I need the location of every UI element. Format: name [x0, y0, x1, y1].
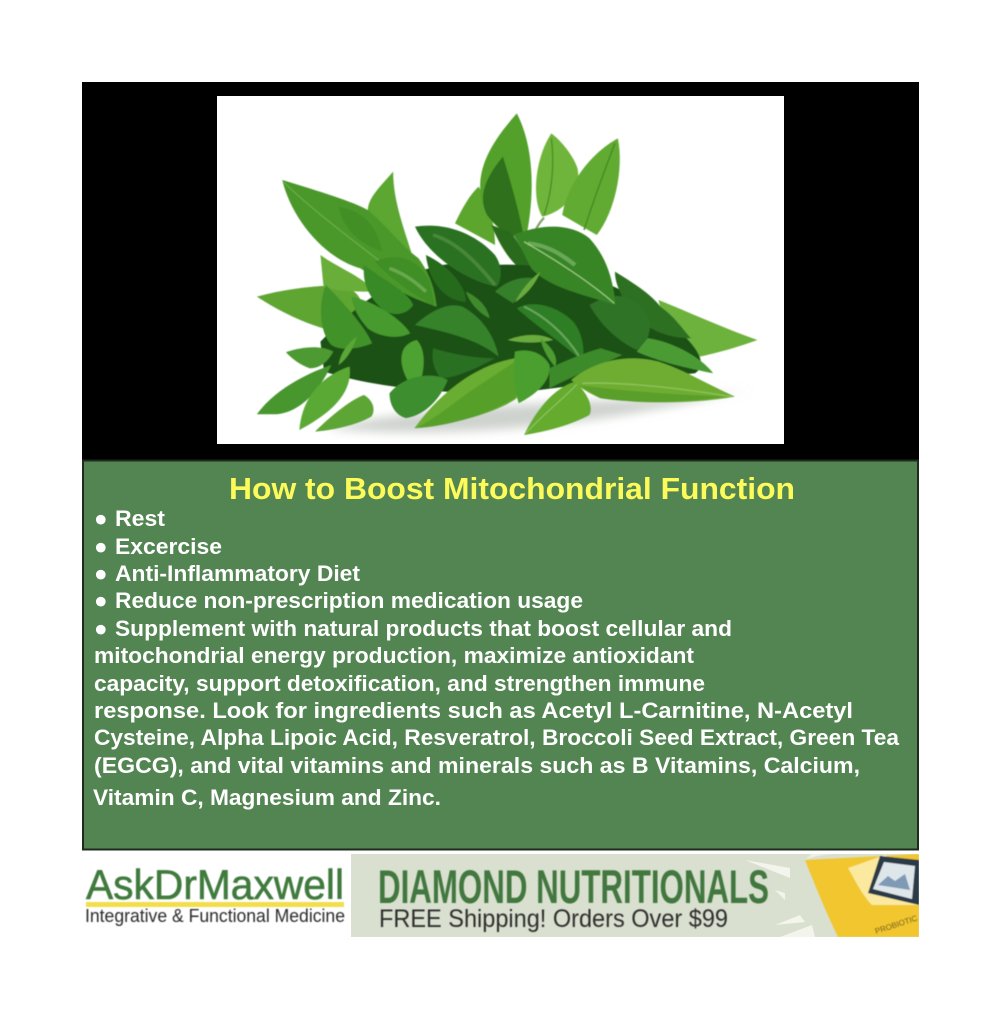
bulleted list: capacity, support detoxification, and strengthen immune [94, 671, 705, 696]
banner: Diamond Nutritionals: DIAMOND NUTRITIONALS [378, 860, 769, 913]
bulleted list: response. Look for ingredients such as Acetyl L-Carnitine, N-Acetyl [94, 698, 853, 723]
icon: supplement bottle [805, 854, 919, 937]
bulleted list: ● [94, 588, 108, 613]
panel: how to boost mitochondrial function [83, 460, 918, 850]
banner: Diamond Nutritionals: FREE Shipping! Orders Over $99 [379, 905, 728, 933]
bulleted list: ● [94, 616, 108, 641]
bulleted list: ● [94, 534, 108, 559]
bulleted list: ● [94, 561, 108, 586]
infographic canvas [82, 82, 919, 937]
bulleted list: ● [94, 506, 108, 531]
bulleted list: Reduce non-prescription medication usage [115, 588, 583, 613]
bulleted list: Anti-Inflammatory Diet [115, 561, 361, 586]
bulleted list: Cysteine, Alpha Lipoic Acid, Resveratrol, Broccoli Seed Extract, Green Tea [94, 725, 899, 750]
bulleted list: Rest [115, 506, 166, 531]
panel: black image frame [82, 82, 919, 460]
heading: How to Boost Mitochondrial Function [229, 471, 795, 506]
bulleted list: Vitamin C, Magnesium and Zinc. [93, 785, 441, 810]
bulleted list: mitochondrial energy production, maximize antioxidant [94, 643, 695, 668]
bulleted list: Supplement with natural products that boost cellular and [115, 616, 732, 641]
banner: Diamond Nutritionals [351, 854, 919, 937]
icon: supplement bottle: PROBIOTIC [874, 914, 919, 936]
logo: AskDrMaxwell: Integrative & Functional Medicine [85, 906, 345, 926]
bulleted list: (EGCG), and vital vitamins and minerals such as B Vitamins, Calcium, [94, 753, 860, 778]
bulleted list: Excercise [115, 534, 222, 559]
photo: green tea leaves [217, 96, 784, 444]
bulleted list [93, 506, 899, 810]
logo: AskDrMaxwell: AskDrMaxwell [86, 861, 344, 908]
